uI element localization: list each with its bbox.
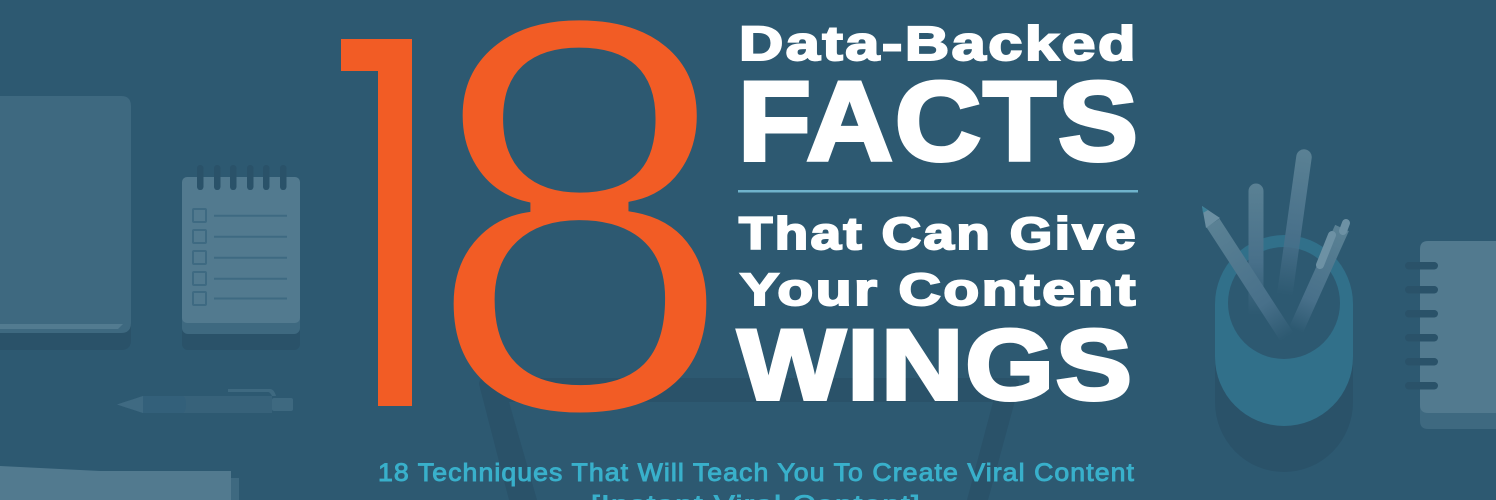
title [738, 17, 1140, 420]
divider [738, 190, 1138, 192]
title line: FACTS: FACTS [738, 59, 1140, 184]
icon: closed book [0, 96, 131, 350]
icon: desk shadow [479, 378, 1019, 500]
icon: pen [117, 389, 293, 413]
subtitle line 1: 18 Techniques That Will Teach You To Create Viral Content [378, 459, 1135, 487]
icon: pen cup [1202, 157, 1353, 472]
icon: spiral notebook [1405, 241, 1496, 429]
title line: Your Content: Your Content [740, 264, 1138, 315]
icon: checklist notepad [182, 165, 300, 350]
icon: paper stack [0, 466, 239, 500]
big number 18 [341, 20, 706, 412]
subtitle [378, 459, 1135, 500]
title line: WINGS: WINGS [738, 309, 1134, 420]
title line: That Can Give: That Can Give [739, 208, 1138, 259]
title line: Data-Backed: Data-Backed [739, 17, 1138, 71]
